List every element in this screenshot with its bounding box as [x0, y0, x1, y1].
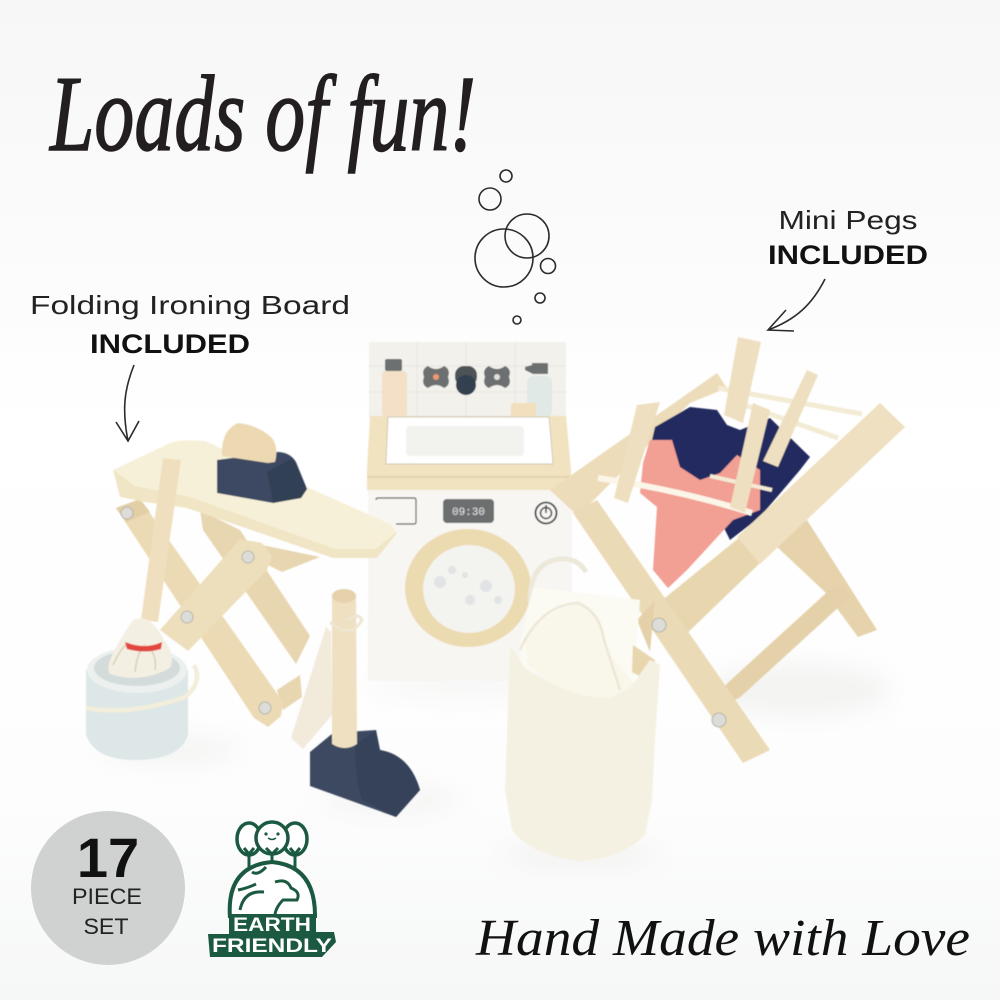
front rail [737, 403, 905, 564]
door window [423, 545, 515, 633]
screws [652, 618, 726, 727]
icon: earth friendly logo [208, 822, 336, 957]
board top [113, 440, 396, 549]
badge: 17 piece set [31, 811, 185, 965]
callout: folding ironing board [30, 290, 350, 441]
tied string [330, 616, 362, 631]
stick [332, 590, 357, 748]
front cloth [525, 604, 640, 700]
washing machine [367, 342, 572, 681]
iron handle [222, 423, 276, 463]
mop head [108, 618, 172, 678]
right tap [484, 366, 510, 388]
back rail [550, 373, 727, 516]
screws [121, 507, 271, 714]
rear leg [775, 520, 877, 637]
back leg [200, 510, 310, 664]
worktop [367, 416, 571, 490]
bucket body [86, 670, 188, 760]
title: Loads of fun! [49, 55, 476, 174]
logo wordmark banner [208, 914, 336, 957]
washing machine: 09:30 [452, 507, 485, 519]
peg 4 [730, 403, 770, 513]
callout text: mini pegs: Mini Pegs [778, 205, 918, 235]
under-board brace [262, 545, 320, 572]
cloth [291, 627, 332, 749]
peg 2 [763, 370, 818, 467]
iron soleplate [217, 452, 307, 503]
callout: mini pegs [768, 205, 928, 331]
callout emphasis: included: INCLUDED [768, 240, 928, 270]
backsplash [369, 342, 566, 418]
left long leg [573, 500, 770, 763]
peg 1 [724, 337, 761, 423]
badge number: 17 [77, 826, 139, 889]
badge label: SET [84, 914, 129, 939]
mop and bucket [86, 458, 197, 760]
board side [113, 470, 397, 558]
lower back leg [637, 600, 655, 652]
base [310, 730, 420, 817]
power button [536, 502, 556, 524]
lower brace [277, 675, 302, 710]
arrow: to ironing board [116, 365, 139, 441]
bottles [382, 371, 407, 417]
front handle [520, 603, 620, 690]
sink [386, 417, 553, 464]
red band [125, 642, 162, 652]
logo wordmark line 2: FRIENDLY [212, 936, 332, 957]
display [443, 499, 494, 523]
navy shirt [652, 407, 810, 540]
cross bar [650, 537, 760, 640]
long leg [116, 499, 283, 727]
rod [734, 595, 838, 690]
pink shirt [640, 440, 760, 588]
badge circle [31, 811, 185, 965]
wood behind [632, 645, 655, 682]
bucket rope [86, 665, 197, 710]
cabinet body [368, 488, 572, 681]
door ring [405, 529, 531, 647]
icon: soap bubbles [475, 170, 556, 324]
back handle [530, 559, 586, 602]
laundry basket [505, 559, 660, 861]
callout emphasis: included: INCLUDED [90, 329, 250, 359]
trees and face [237, 822, 307, 855]
left tap [423, 366, 449, 388]
hand brush and cloth [291, 589, 420, 817]
ironing board [113, 423, 397, 727]
drying rack [550, 337, 905, 763]
mop stick [141, 458, 181, 622]
faucet [455, 366, 477, 386]
upper ropes [718, 388, 862, 438]
callout text: folding ironing board: Folding Ironing Board [30, 290, 350, 320]
main rope [598, 478, 752, 513]
floor shadows [100, 664, 890, 867]
globe [230, 862, 315, 918]
drawer outline [376, 498, 416, 524]
arrow: to mini pegs [768, 279, 825, 331]
logo wordmark line 1: EARTH [233, 915, 311, 936]
front cross leg [160, 539, 272, 651]
badge label: PIECE [72, 884, 142, 909]
bag body [505, 645, 660, 861]
tagline: Hand Made with Love [475, 910, 970, 967]
back cloth [520, 587, 640, 690]
peg 3 [614, 402, 660, 503]
